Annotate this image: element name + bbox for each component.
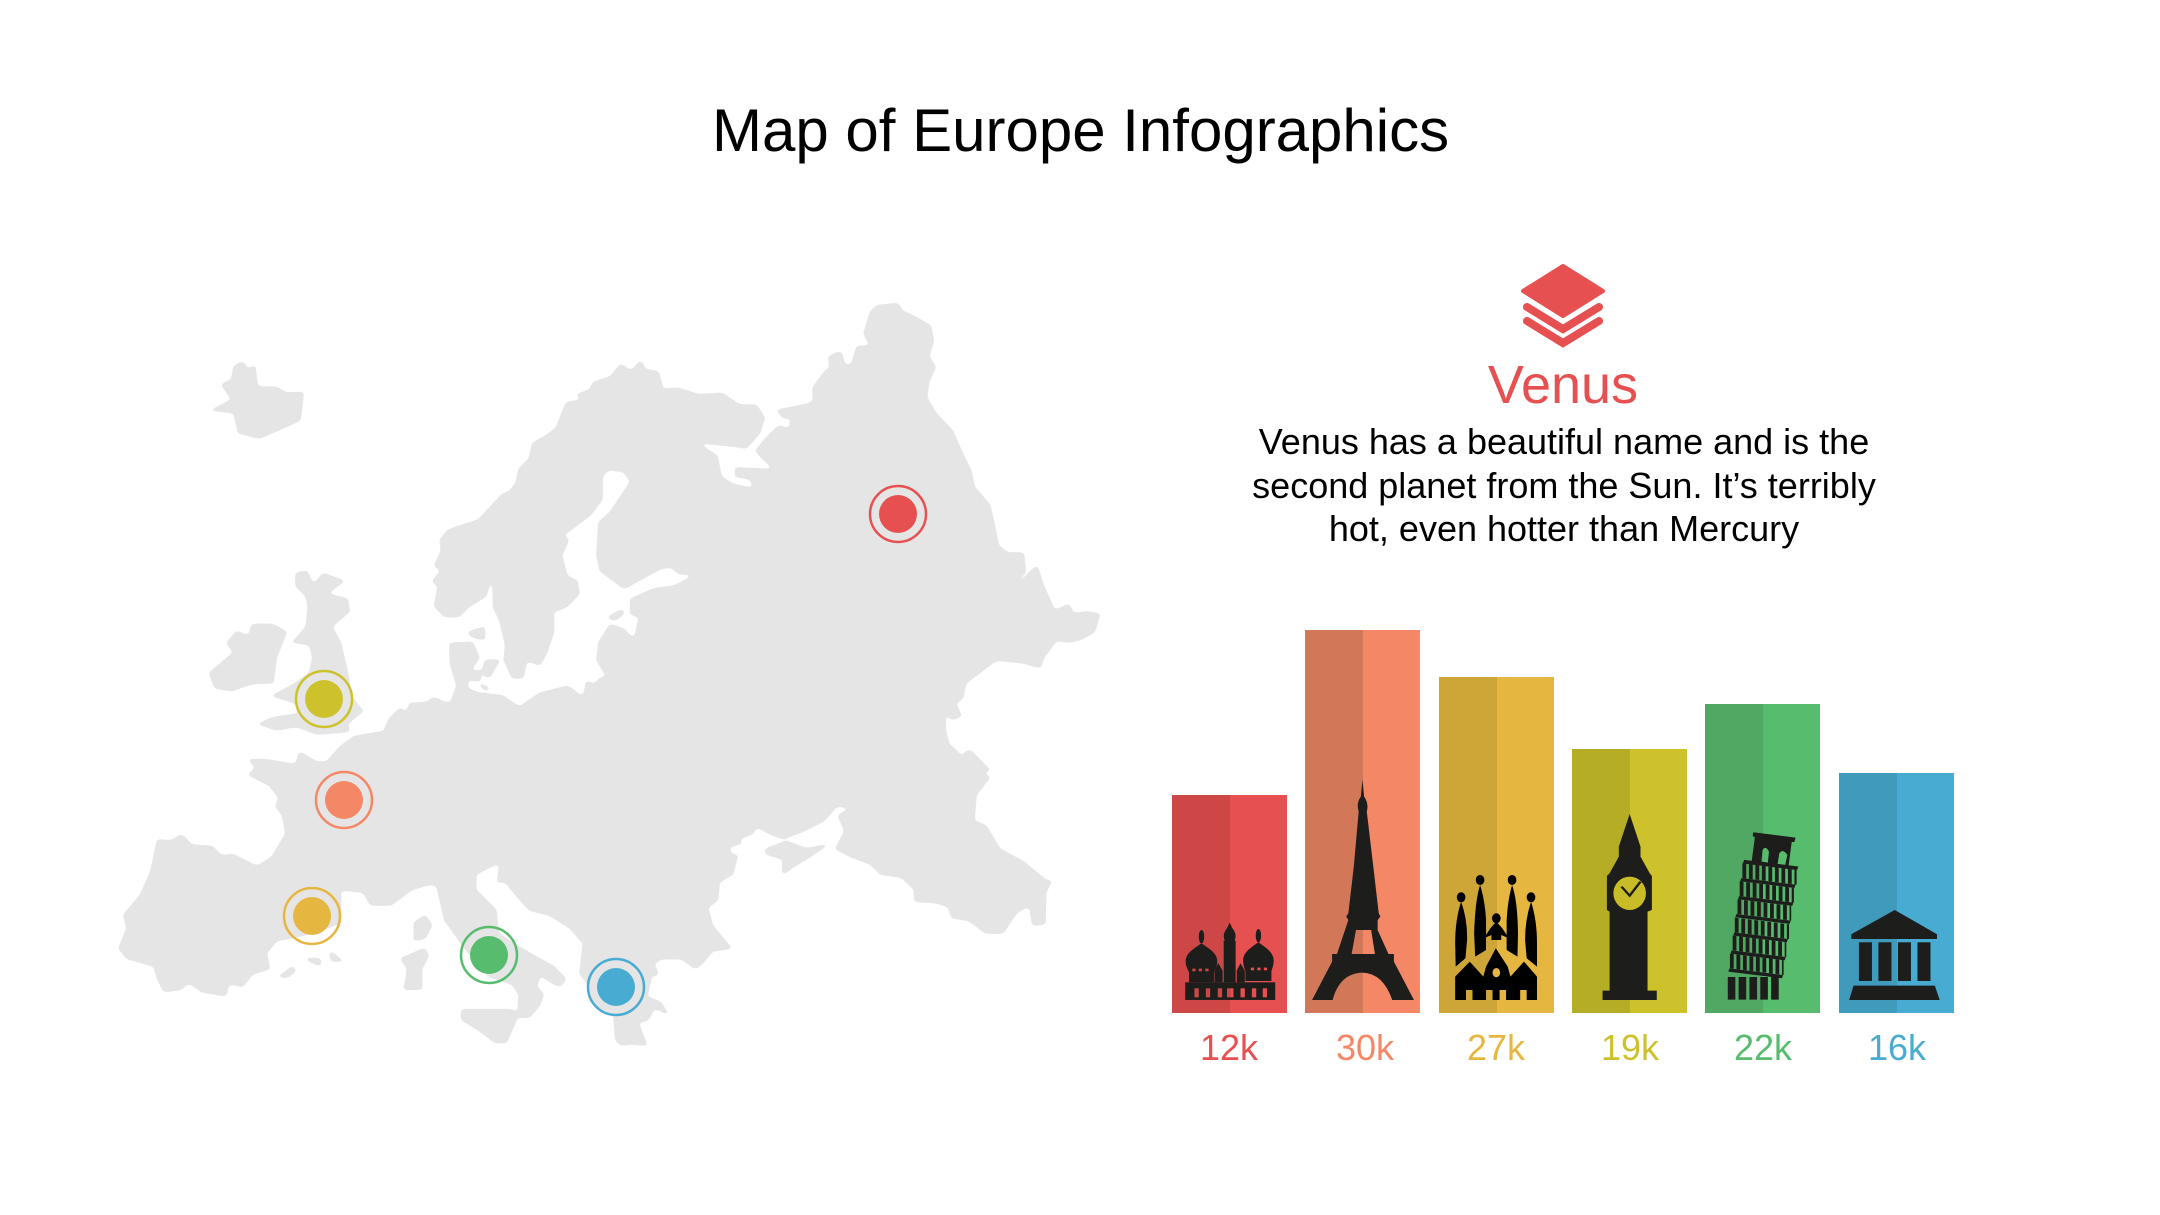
value labels: 27k: [1467, 1027, 1526, 1068]
landmark: classical temple: [1849, 910, 1940, 1000]
map pin: salmon: [316, 772, 372, 828]
map pin: blue: [588, 959, 644, 1015]
bar: blue 16k: [1839, 773, 1954, 1013]
description text: hot, even hotter than Mercury: [1329, 508, 1799, 549]
mainland Europe: [119, 303, 1099, 1045]
map pin: yellow: [296, 671, 352, 727]
description text: second planet from the Sun. It’s terribly: [1252, 465, 1876, 506]
landmark: Sagrada Familia: [1455, 875, 1537, 1000]
description text: Venus has a beautiful name and is the: [1259, 421, 1869, 462]
landmark: Big Ben: [1603, 814, 1657, 1000]
Baltic islands: [469, 609, 623, 691]
bar: green 22k: [1705, 704, 1820, 1013]
title: Map of Europe Infographics: [712, 97, 1449, 164]
Iceland: [212, 362, 303, 438]
landmark: Eiffel Tower: [1312, 779, 1414, 1000]
landmark: Leaning Tower of Pisa: [1728, 832, 1798, 988]
Ireland: [210, 624, 286, 691]
value labels: [1200, 1027, 1927, 1068]
Mediterranean islands: [279, 915, 516, 1043]
heading: Venus: Venus: [1488, 355, 1638, 415]
value labels: 16k: [1868, 1027, 1927, 1068]
description text: [1252, 421, 1876, 549]
bar: yellow 19k: [1572, 749, 1687, 1013]
value labels: 12k: [1200, 1027, 1259, 1068]
bar: red 12k: [1172, 795, 1287, 1013]
bar: salmon 30k: [1305, 630, 1420, 1013]
map pin: amber: [284, 888, 340, 944]
value labels: 22k: [1734, 1027, 1793, 1068]
map pin: green: [461, 927, 517, 983]
Great Britain: [259, 571, 363, 734]
bar chart: [1172, 630, 1954, 1013]
value labels: 30k: [1336, 1027, 1395, 1068]
map of Europe: [119, 303, 1099, 1045]
value labels: 19k: [1601, 1027, 1660, 1068]
bar: amber 27k: [1439, 677, 1554, 1013]
map pin: red: [870, 486, 926, 542]
Crimea: [766, 841, 827, 874]
icon: stacked layers: [1523, 266, 1603, 343]
landmark: onion dome cathedral: [1185, 923, 1275, 1000]
